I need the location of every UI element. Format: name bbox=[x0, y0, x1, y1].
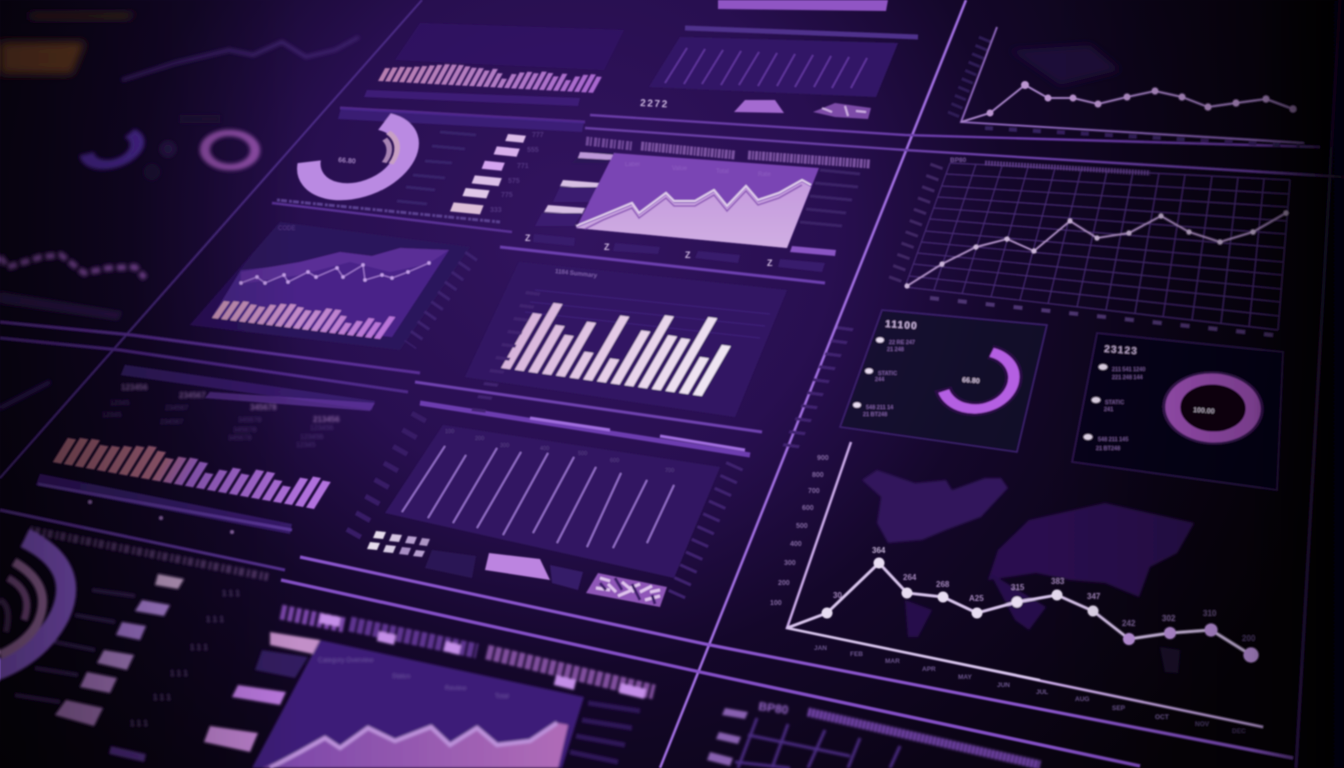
label row: 200 bbox=[475, 436, 484, 442]
footer ticker bbox=[277, 200, 500, 222]
header mosaics bbox=[586, 141, 870, 164]
panel: bottom area chart bbox=[204, 612, 654, 768]
donut ring bbox=[1162, 370, 1264, 446]
list: value columns bbox=[130, 589, 240, 728]
chart axes bbox=[787, 442, 1263, 727]
legend items: 21 BT248 bbox=[1096, 446, 1120, 452]
range handles bbox=[88, 500, 234, 534]
y axis labels: 400 bbox=[790, 541, 802, 548]
tick labels row bbox=[525, 233, 773, 268]
chart header labels: Review bbox=[445, 685, 467, 692]
label row: 400 bbox=[540, 446, 549, 452]
chart header labels bbox=[318, 657, 509, 700]
x axis labels bbox=[930, 298, 1290, 337]
panel: donut card one bbox=[840, 310, 1047, 452]
label row bbox=[445, 429, 674, 474]
bar chart: mid-left bars bbox=[53, 432, 333, 509]
line series bbox=[787, 563, 1251, 655]
data point values: 383 bbox=[1051, 577, 1065, 586]
icon: pixel block bbox=[586, 573, 667, 607]
icon: tile grid bbox=[367, 531, 430, 557]
data table: 123456 bbox=[310, 425, 333, 432]
line columns bbox=[402, 446, 674, 548]
data point values: 264 bbox=[903, 573, 917, 582]
side tabs bbox=[270, 632, 320, 654]
chart: area plot bbox=[252, 640, 584, 768]
list: value columns: 575 bbox=[508, 178, 520, 185]
chart: faint slanted lines bbox=[665, 48, 867, 88]
x axis labels bbox=[814, 645, 1246, 735]
list: value columns: 1 1 1 bbox=[153, 693, 171, 702]
chart header labels: Category Overview bbox=[318, 657, 374, 664]
data point values: A25 bbox=[969, 594, 984, 603]
panel: centre bar chart bbox=[465, 262, 846, 457]
line series bbox=[239, 261, 431, 285]
chart header labels: Status bbox=[392, 673, 411, 680]
range strip bbox=[36, 474, 292, 534]
panel: bottom-left donut list bbox=[0, 530, 268, 758]
data table: 213456 bbox=[313, 415, 340, 424]
panel: long lines chart bbox=[350, 415, 735, 607]
axis ticks bbox=[672, 465, 735, 605]
right rows bbox=[570, 703, 640, 762]
data point values: 242 bbox=[1122, 619, 1136, 628]
list: value columns: 333 bbox=[490, 207, 502, 214]
y axis labels: 500 bbox=[796, 523, 808, 530]
data table: 123456 bbox=[300, 434, 323, 441]
donut value: 66.80 bbox=[962, 377, 980, 385]
data point values: 310 bbox=[1203, 609, 1217, 618]
data point values: 347 bbox=[1087, 592, 1101, 601]
right tick rows bbox=[800, 170, 860, 226]
donut gauge bbox=[285, 111, 431, 201]
axis ticks left bbox=[476, 287, 846, 457]
icon: trapezoid bbox=[485, 553, 550, 580]
bar chart: pale bars bbox=[501, 294, 745, 396]
data point values: 268 bbox=[936, 580, 950, 589]
x axis labels: JAN bbox=[814, 645, 827, 652]
legend items: 21 BT248 bbox=[863, 412, 887, 418]
x axis labels: MAR bbox=[885, 658, 900, 665]
legend items: 241 bbox=[1104, 407, 1113, 413]
axis ticks bbox=[410, 255, 472, 345]
partial donut bbox=[0, 538, 66, 672]
y axis labels: 100 bbox=[770, 600, 782, 607]
icon: trapezoid bbox=[734, 100, 784, 113]
x axis labels: MAY bbox=[958, 674, 973, 681]
list: value columns: 777 bbox=[532, 132, 544, 139]
donut arc bbox=[929, 343, 1027, 417]
data table: 12345 bbox=[110, 400, 130, 407]
header mosaics bbox=[281, 612, 654, 692]
x axis labels: AUG bbox=[1075, 696, 1089, 703]
y axis labels bbox=[893, 165, 937, 285]
data point values: 315 bbox=[1011, 583, 1025, 592]
data table: 345678 bbox=[228, 435, 251, 442]
panel: blurred top-left widgets bbox=[0, 12, 359, 408]
line series bbox=[961, 85, 1293, 122]
data table: 123456 bbox=[121, 383, 148, 392]
legend items bbox=[853, 337, 915, 418]
label row: 700 bbox=[665, 468, 674, 474]
label row: 600 bbox=[610, 458, 619, 464]
data point values: 200 bbox=[1242, 634, 1256, 643]
x axis labels: DEC bbox=[1232, 728, 1246, 735]
label: panel caption: CODE bbox=[278, 226, 295, 232]
data table: 234567 bbox=[165, 405, 188, 412]
panel: table with bars bbox=[36, 365, 375, 534]
label row: 300 bbox=[500, 443, 509, 449]
data table: 345678 bbox=[250, 403, 277, 412]
chart header labels: Label bbox=[625, 162, 640, 168]
data table: 345678 bbox=[233, 427, 256, 434]
x axis ticks bbox=[985, 128, 1300, 146]
bar chart: top small bars bbox=[378, 61, 604, 93]
tick labels row: Z bbox=[604, 242, 610, 252]
y axis labels: 900 bbox=[817, 455, 829, 462]
legend items: STATIC bbox=[878, 371, 897, 377]
y axis labels: 300 bbox=[784, 560, 796, 567]
data table: 234567 bbox=[160, 419, 183, 426]
panel: mini combo chart bbox=[190, 222, 472, 350]
donut value: 100.00 bbox=[1193, 407, 1215, 415]
x axis labels: NOV bbox=[1195, 721, 1210, 728]
list: value columns: 1 1 1 bbox=[170, 669, 188, 678]
panel: grid line chart bbox=[893, 157, 1290, 337]
chart header labels: Total bbox=[495, 693, 509, 700]
data point values: 302 bbox=[1162, 614, 1176, 623]
legend items: 22 RE 247 bbox=[889, 340, 915, 346]
table title: BP80 bbox=[758, 699, 790, 717]
x axis labels: SEP bbox=[1112, 705, 1126, 712]
tick labels row: Z bbox=[525, 233, 531, 243]
y axis labels: 600 bbox=[802, 505, 814, 512]
legend items: STATIC bbox=[1105, 400, 1124, 406]
legend items bbox=[1084, 364, 1145, 452]
x axis labels: APR bbox=[922, 666, 936, 673]
list: value columns: 1 1 1 bbox=[206, 615, 224, 624]
line series bbox=[907, 213, 1286, 286]
row labels bbox=[707, 708, 748, 766]
panel: world map line chart bbox=[770, 442, 1263, 735]
grid bbox=[905, 163, 1290, 330]
x axis labels: FEB bbox=[850, 651, 863, 658]
world map bbox=[862, 470, 1194, 673]
list: value columns: 1 1 1 bbox=[190, 643, 208, 652]
legend items: 21 248 bbox=[887, 347, 904, 353]
data point values: 364 bbox=[872, 546, 886, 555]
panel: semicircle gauge list bbox=[277, 108, 584, 222]
data point values bbox=[833, 546, 1256, 643]
x axis labels: JUL bbox=[1036, 689, 1048, 696]
panel: area chart highlighted bbox=[525, 141, 870, 272]
data table bbox=[102, 383, 340, 449]
y axis labels bbox=[770, 455, 829, 607]
panel: bottom-right grid table bbox=[707, 699, 1040, 768]
label row: 100 bbox=[445, 429, 454, 435]
y axis labels: 800 bbox=[812, 472, 824, 479]
chart header labels: Value bbox=[672, 166, 688, 172]
legend items: 211 541 1240 bbox=[1112, 367, 1145, 373]
side tabs bbox=[535, 152, 616, 226]
legend items: 548 211 14 bbox=[866, 405, 894, 411]
label: gauge value: 66.80 bbox=[338, 157, 356, 166]
chart header labels: Rate bbox=[758, 172, 771, 178]
legend items: 221 248 144 bbox=[1112, 375, 1144, 381]
label: summary: 1184 Summary bbox=[555, 269, 598, 279]
y axis labels: 200 bbox=[778, 580, 790, 587]
panel: top line-bars bbox=[640, 0, 918, 119]
legend items: 244 bbox=[875, 377, 885, 383]
list: value columns: 775 bbox=[501, 192, 513, 199]
list: value columns bbox=[490, 132, 544, 214]
tick labels row: Z bbox=[767, 258, 773, 268]
header mosaic bbox=[30, 530, 268, 577]
chart axes bbox=[961, 27, 1304, 143]
header mosaic bbox=[808, 712, 1040, 765]
chart header labels: Total bbox=[716, 169, 729, 175]
panel: top-right line chart bbox=[952, 27, 1304, 146]
tick labels row: Z bbox=[685, 250, 691, 260]
panel: top bars strip bbox=[364, 23, 624, 106]
data table: 345678 bbox=[238, 417, 261, 424]
label: small codes: 2272 bbox=[640, 98, 669, 110]
list: value columns: 1 1 1 bbox=[222, 589, 240, 598]
data table: 12345 bbox=[296, 442, 316, 449]
table grid bbox=[735, 718, 900, 768]
icon: pixel block bbox=[813, 103, 871, 119]
legend items: 548 211 145 bbox=[1098, 437, 1128, 443]
list: value columns: 771 bbox=[517, 163, 529, 170]
y axis labels: 700 bbox=[808, 488, 820, 495]
list: value columns: 1 1 1 bbox=[130, 719, 148, 728]
x axis labels: JUN bbox=[997, 682, 1010, 689]
data table: 12345 bbox=[102, 412, 122, 419]
chart: area plot bbox=[576, 153, 819, 248]
card title: 23123 bbox=[1104, 344, 1138, 357]
x axis labels: OCT bbox=[1155, 714, 1169, 721]
chart header: BP80 bbox=[950, 157, 967, 164]
label row: 500 bbox=[578, 451, 587, 457]
panel: donut card two bbox=[1072, 333, 1283, 490]
bar chart: mini bars bbox=[212, 296, 395, 339]
card title: 11100 bbox=[885, 319, 918, 332]
data table: 234567 bbox=[179, 391, 206, 400]
data point values: 30 bbox=[833, 591, 842, 600]
list: value columns: 555 bbox=[527, 147, 539, 154]
list: stacked bars bbox=[450, 131, 526, 216]
list: blocks bbox=[55, 574, 184, 726]
chart header labels bbox=[625, 162, 771, 178]
